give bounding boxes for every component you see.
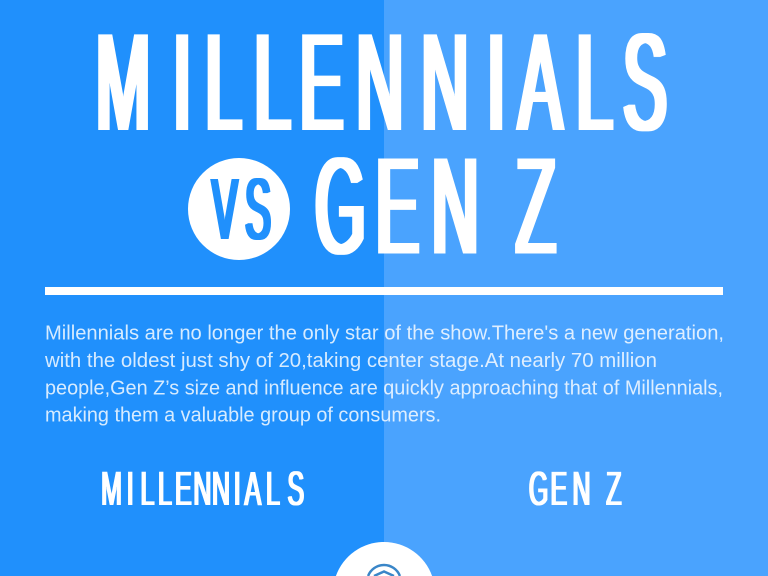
column heading: Millennials: MILLENNIALS: [101, 462, 304, 516]
divider rule: [45, 287, 723, 295]
intro text block: with the oldest just shy of 20,taking center stage.At nearly 70 million: [44, 350, 657, 372]
title: Millennials: MILLENNIALS: [96, 6, 667, 161]
intro text block: making them a valuable group of consumers.: [45, 404, 441, 426]
badge: vs: VS: [212, 161, 271, 258]
column heading: Gen Z: GEN Z: [529, 462, 622, 516]
badge: vs: [188, 158, 290, 260]
intro text block: [44, 322, 724, 426]
intro text block: Millennials are no longer the only star of the show.There's a new generation,: [45, 322, 724, 344]
panel: left background: [0, 0, 384, 576]
title: Gen Z: GEN Z: [315, 128, 556, 283]
intro text block: people,Gen Z’s size and influence are quickly approaching that of Millennials,: [45, 378, 723, 400]
icon: circle badge with house: [336, 542, 432, 576]
panel: right background: [384, 0, 768, 576]
